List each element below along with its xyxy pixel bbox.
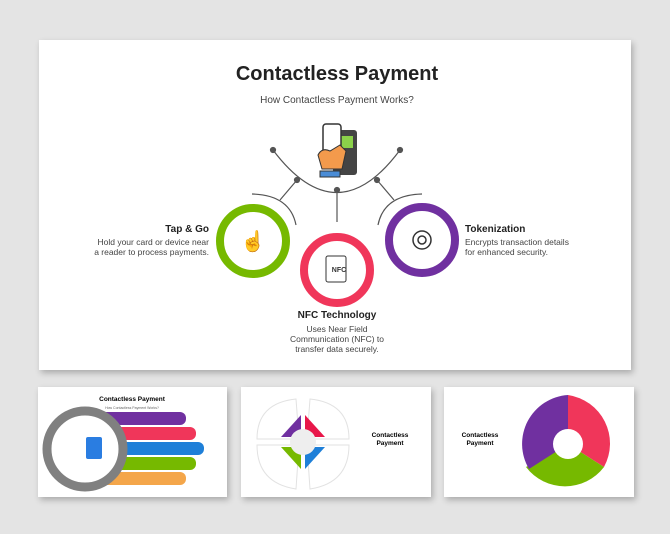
thumbnail 3: Payment — [466, 440, 494, 447]
text: Tap & Go: Tap & Go — [165, 224, 209, 235]
thumbnail 1 — [38, 387, 227, 497]
thumbnail 2: Contactless — [372, 432, 409, 439]
text: NFC Technology: NFC Technology — [298, 310, 377, 321]
title: Contactless Payment — [236, 63, 438, 85]
circle: Tokenization — [389, 207, 455, 273]
text: NFC Technology: Uses Near Field — [307, 324, 368, 334]
circle: NFC — [304, 237, 370, 303]
text: NFC Technology: transfer data securely. — [295, 344, 379, 354]
text: Tokenization: Tokenization — [465, 224, 525, 235]
circle: NFC: NFC — [332, 267, 346, 274]
thumbnail 2: Payment — [376, 440, 404, 447]
thumbnail 2 — [241, 387, 431, 497]
subtitle: How Contactless Payment Works? — [260, 95, 414, 106]
thumbnail 1: Contactless Payment — [99, 396, 166, 403]
thumbnail 3 — [444, 387, 634, 497]
text: NFC Technology: Communication (NFC) to — [290, 334, 384, 344]
text: Tokenization: Encrypts transaction details — [465, 237, 569, 247]
thumbnail 1: How Contactless Payment Works? — [105, 406, 159, 410]
text: Tokenization: for enhanced security. — [465, 247, 548, 257]
text: Tap & Go — [94, 224, 209, 257]
circle: Tap & Go — [220, 208, 286, 274]
text: NFC Technology — [290, 310, 384, 354]
text: Tokenization — [465, 224, 569, 257]
connector arcs — [252, 148, 422, 250]
text: Tap & Go: a reader to process payments. — [94, 247, 209, 257]
icon: hand with card terminal — [318, 124, 357, 177]
main slide — [39, 40, 631, 370]
text: Tap & Go: Hold your card or device near — [97, 237, 209, 247]
circle: Tap & Go: ☝ — [241, 229, 265, 253]
thumbnail 3: Contactless — [462, 432, 499, 439]
